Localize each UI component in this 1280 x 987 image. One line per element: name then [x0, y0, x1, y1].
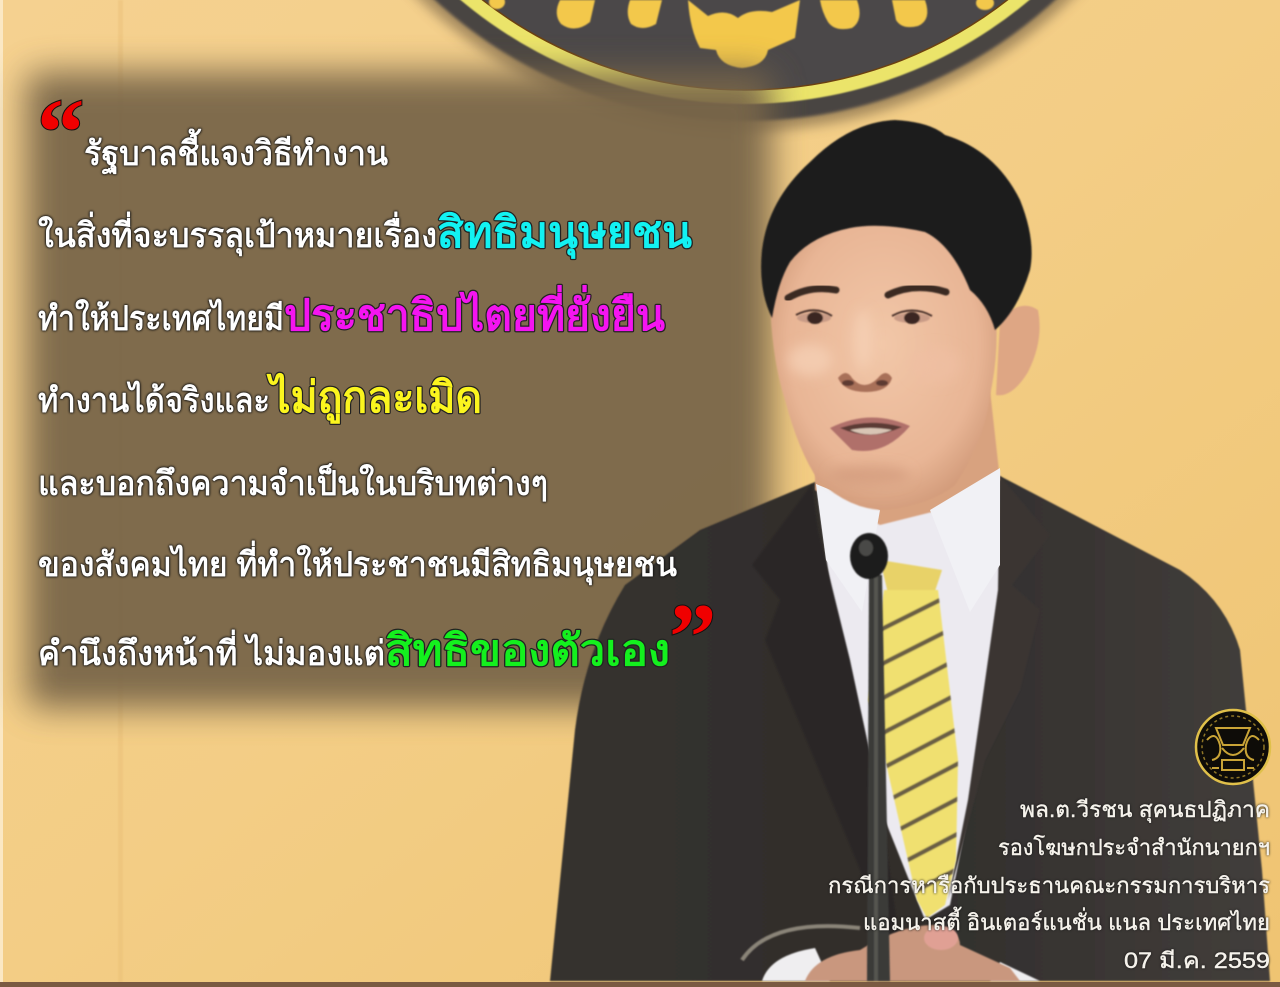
line 3	[38, 285, 666, 340]
clasped hands	[805, 925, 1020, 981]
closing quote mark: ”	[669, 584, 716, 690]
line 4: ทำงานได้จริงและ	[38, 381, 270, 420]
eyebrows	[788, 288, 946, 298]
line 2: สิทธิมนุษยชน	[437, 209, 693, 260]
line 2	[38, 209, 693, 260]
speaker caption	[828, 797, 1270, 973]
line 3: ประชาธิปไตยที่ยั่งยืน	[284, 285, 666, 340]
line 4	[38, 372, 482, 424]
suit jacket	[550, 476, 1270, 981]
left shirt cuff	[762, 948, 830, 981]
mic cable	[742, 926, 860, 960]
topic line 1: กรณีการหารือกับประธานคณะกรรมการบริหาร	[828, 873, 1270, 898]
collar right	[930, 468, 1000, 612]
fingertip	[924, 926, 958, 950]
nose	[838, 373, 892, 392]
line 1: รัฐบาลชี้แจงวิธีทำงาน	[84, 129, 388, 174]
gold ornaments	[489, 0, 994, 68]
line 6: ของสังคมไทย ที่ทำให้ประชาชนมีสิทธิมนุษยชน	[38, 541, 677, 585]
neck	[815, 390, 1000, 525]
necktie	[867, 560, 959, 918]
mouth	[830, 417, 910, 451]
line 3: ทำให้ประเทศไทยมี	[38, 299, 284, 338]
line 2: ในสิ่งที่จะบรรลุเป้าหมายเรื่อง	[38, 212, 437, 256]
ear	[996, 306, 1040, 395]
face	[770, 209, 997, 510]
date: 07 มี.ค. 2559	[1124, 948, 1270, 973]
government seal badge	[1196, 710, 1270, 784]
line 5: และบอกถึงความจำเป็นในบริบทต่างๆ	[38, 463, 548, 503]
topic line 2: แอมนาสตี้ อินเตอร์แนชั่น แนล ประเทศไทย	[863, 907, 1270, 935]
speaker name: พล.ต.วีรชน สุคนธปฏิภาค	[1020, 797, 1270, 823]
right lapel	[948, 476, 1050, 900]
microphone	[850, 533, 890, 981]
line 7: คำนึงถึงหน้าที่ ไม่มองแต่	[38, 630, 385, 673]
line 7	[38, 627, 670, 675]
speaker photo illustration	[550, 120, 1270, 981]
collar left	[816, 484, 880, 612]
emblem on wall	[277, 0, 1213, 131]
line 4: ไม่ถูกละเมิด	[266, 372, 482, 424]
shirt	[816, 470, 1000, 920]
dark text panel	[26, 72, 772, 708]
speaker role: รองโฆษกประจำสำนักนายกฯ	[998, 835, 1270, 860]
eyes	[796, 310, 932, 324]
right shirt cuff	[990, 962, 1040, 981]
line 7: สิทธิของตัวเอง	[385, 627, 670, 675]
face shading	[788, 310, 961, 485]
hair	[761, 120, 1032, 330]
left lapel	[752, 484, 905, 981]
quote text block	[37, 79, 716, 690]
opening quote mark: “	[37, 79, 84, 185]
